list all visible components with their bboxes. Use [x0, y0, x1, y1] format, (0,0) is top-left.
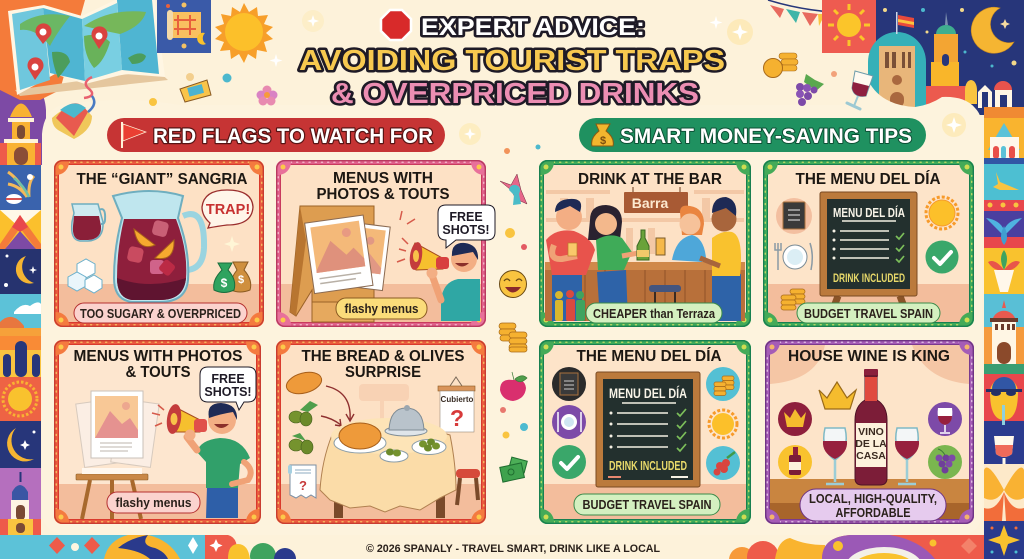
chalkboard: [596, 372, 700, 487]
arrows: [321, 386, 354, 426]
cubierto sign: [438, 377, 475, 432]
icon: money bag: $: [600, 135, 606, 147]
chalkboard: MENU DEL DÍA: [609, 386, 687, 401]
icon: glass circle: [928, 402, 962, 436]
caption: TOO SUGARY & OVERPRICED: [80, 307, 241, 321]
footer credit: © 2026 SPANALY - TRAVEL SMART, DRINK LIKE A LOCAL: [366, 543, 660, 555]
icon: plate circle: [552, 405, 586, 439]
wine bottle: VINO: [858, 426, 884, 438]
panel: the menu del dia 2: [539, 340, 751, 524]
icon: small menu: [776, 198, 812, 234]
icon: smiling face: [500, 270, 526, 298]
caption: [336, 298, 427, 319]
giant pitcher: [113, 191, 204, 302]
main cream panel: [42, 80, 982, 535]
money bags: $: [238, 274, 244, 286]
icon: small ticket: [180, 80, 211, 102]
barra sign: [624, 187, 688, 213]
icon: blue scroll tile: [157, 0, 211, 53]
icon: plate and cutlery: [775, 243, 812, 270]
panel: house wine is king: [765, 340, 974, 524]
bottom decorative band right: [729, 535, 984, 559]
icon: fruit circle: [706, 446, 740, 480]
icon: gold coins: [499, 323, 527, 352]
panel: the menu del dia: [763, 160, 974, 327]
friends at the bar: [546, 197, 741, 321]
panel: menus with photos and touts 2: [54, 340, 261, 524]
heading: PHOTOS & TOUTS: [316, 186, 450, 203]
icon: crown circle: [778, 402, 812, 436]
icon: ribbon: [500, 174, 527, 205]
caption: [107, 492, 200, 513]
bottom decorative band left: [0, 535, 296, 559]
heading: red flags: [107, 118, 445, 152]
icon: grapes: [796, 74, 824, 106]
caption: flashy menus: [344, 302, 419, 316]
caption: flashy menus: [116, 496, 192, 510]
chalkboard: [820, 192, 917, 304]
icon: carpet basket: [52, 77, 94, 139]
caption: AFFORDABLE: [836, 506, 910, 520]
icon: apple: [500, 372, 527, 401]
heading: money saving: [579, 118, 926, 152]
barra sign: Barra: [632, 195, 668, 211]
icon: money bag: [592, 124, 613, 147]
tout person: [426, 243, 480, 321]
wine bottle: DE LA: [855, 438, 887, 450]
decorative confetti dots and sparkles: [149, 10, 966, 150]
heading: [74, 348, 243, 381]
woman in green: [588, 205, 644, 321]
icon: sun: [926, 197, 958, 229]
table with bread and olives: [320, 405, 456, 518]
caption: [797, 303, 940, 323]
heading: [302, 348, 465, 381]
money bags: $: [221, 276, 228, 290]
icons between columns: [499, 148, 528, 482]
bar counter: [545, 262, 745, 321]
heading: MENUS WITH PHOTOS: [74, 348, 243, 365]
cubierto sign: ?: [450, 405, 464, 431]
top-left folded world map: [0, 0, 168, 100]
top-right city night scene: [768, 0, 1024, 118]
panel: menus with photos and touts: [276, 160, 496, 327]
crown: [819, 382, 856, 409]
caption: BUDGET TRAVEL SPAIN: [804, 307, 933, 321]
wine bottle: [855, 369, 887, 485]
icon: green check: [926, 240, 958, 274]
heading: DRINK AT THE BAR: [578, 171, 722, 188]
photos: [305, 215, 390, 294]
shelves: [546, 190, 744, 254]
icon: check circle: [552, 445, 586, 479]
heading: money saving: SMART MONEY-SAVING TIPS: [620, 125, 912, 148]
left decorative tile border: [0, 0, 60, 559]
icon: sun: [215, 3, 273, 63]
bill: [288, 465, 316, 498]
caption: [74, 303, 247, 323]
panel: the giant sangria: [54, 160, 264, 327]
heading: THE MENU DEL DÍA: [796, 169, 941, 188]
megaphone and lines: [152, 403, 207, 435]
speech bubble: trap: [202, 190, 253, 228]
icon: coins circle: [706, 367, 740, 401]
caption: [586, 303, 722, 323]
icon: red flag: [121, 122, 146, 148]
icon: flower: [256, 86, 278, 106]
icon: grapes circle: [928, 445, 962, 479]
icon: wine glass: [847, 71, 873, 109]
caption: CHEAPER than Terraza: [593, 307, 716, 321]
panel: drink at the bar: [539, 160, 751, 327]
chalkboard: DRINK INCLUDED: [609, 459, 687, 473]
heading: & TOUTS: [126, 364, 191, 381]
people icons: [555, 290, 585, 321]
small pitcher: [72, 204, 105, 241]
man in yellow: [700, 197, 741, 321]
stool: [456, 469, 480, 505]
woman in blue: [672, 206, 706, 262]
title line 2: AVOIDING TOURIST TRAPS: [299, 45, 725, 77]
megaphone and lines: [397, 211, 449, 271]
speech bubble: free shots: [438, 205, 495, 248]
heading: MENUS WITH: [333, 170, 433, 187]
caption: [800, 489, 946, 521]
bill: ?: [299, 478, 307, 493]
a-frame sign: [290, 206, 374, 322]
wine glasses: [823, 428, 919, 484]
chalkboard: MENU DEL DÍA: [833, 205, 905, 220]
money bags: [214, 262, 251, 292]
heading: red flags: RED FLAGS TO WATCH FOR: [153, 125, 433, 148]
speech bubble: free shots: SHOTS!: [442, 223, 490, 237]
right decorative tile border: [984, 100, 1024, 559]
title line 3: & OVERPRICED DRINKS: [331, 78, 699, 110]
wall sign: [359, 384, 409, 426]
icon: sun: [709, 410, 737, 438]
bottle: [637, 230, 649, 260]
tout person in green: [184, 403, 251, 518]
title: [299, 10, 725, 110]
man in red: [546, 199, 595, 321]
caption: BUDGET TRAVEL SPAIN: [582, 498, 712, 512]
ice cubes: [68, 259, 102, 293]
speech bubble: free shots: FREE: [211, 372, 245, 386]
speech bubble: trap: TRAP!: [206, 202, 250, 218]
heading: [316, 170, 450, 203]
icon: coins: [781, 289, 805, 310]
heading: HOUSE WINE IS KING: [788, 348, 950, 365]
caption: LOCAL, HIGH-QUALITY,: [809, 492, 937, 506]
heading: THE “GIANT” SANGRIA: [76, 171, 248, 188]
bread loaf: [284, 369, 324, 397]
title line 1: EXPERT ADVICE:: [421, 14, 645, 41]
icon: stop sign: [381, 10, 411, 40]
heading: SURPRISE: [345, 364, 421, 381]
easel: [76, 468, 148, 519]
beer glass: [656, 238, 665, 255]
heading: THE MENU DEL DÍA: [576, 346, 722, 365]
caption: [574, 494, 720, 515]
cubierto sign: Cubierto: [441, 395, 474, 404]
olive branches: [289, 401, 318, 454]
speech bubble: free shots: [200, 367, 256, 410]
icon: coin stack: [764, 53, 798, 78]
speech bubble: free shots: FREE: [449, 210, 483, 224]
sparkle: [224, 236, 240, 252]
speech bubble: free shots: SHOTS!: [204, 385, 252, 399]
menu photos: [76, 391, 159, 467]
icon: menu circle: [552, 367, 586, 401]
heading: THE BREAD & OLIVES: [302, 348, 465, 365]
icon: bottle circle: [778, 445, 812, 479]
icon: banknotes: [500, 457, 527, 482]
chalkboard: DRINK INCLUDED: [833, 271, 905, 285]
panel: the bread and olives surprise: [276, 340, 486, 524]
wine bottle: CASA: [856, 450, 886, 462]
